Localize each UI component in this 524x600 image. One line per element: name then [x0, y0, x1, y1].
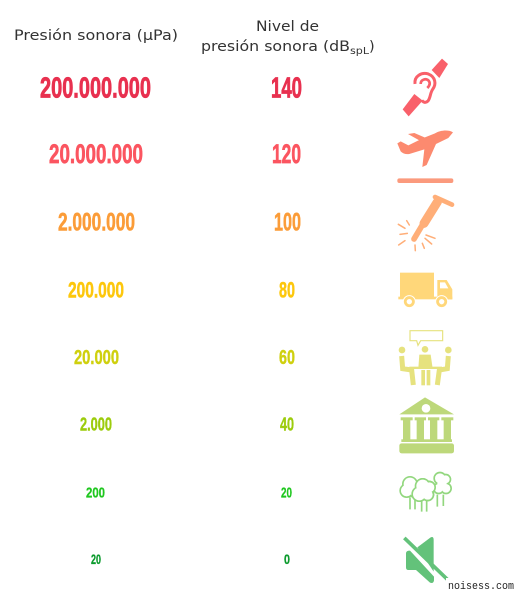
row 8: 20 / 0: 0	[284, 551, 290, 567]
row 5: 20.000 / 60: 20.000	[74, 347, 119, 369]
icon: hearing impaired ear	[403, 59, 448, 116]
heading: sound pressure level: presión sonora (dB	[201, 39, 350, 55]
row 7: 200 / 20: 20	[281, 484, 292, 502]
row 7: 200 / 20: 200	[86, 484, 105, 502]
row 2: 20.000.000 / 120: 120	[272, 139, 301, 169]
row 6: 2.000 / 40: 2.000	[80, 414, 112, 434]
heading: sound pressure level: )	[369, 39, 375, 55]
row 6: 2.000 / 40	[80, 414, 294, 434]
row 6: 2.000 / 40: 40	[280, 414, 294, 434]
icon: jackhammer	[398, 197, 452, 251]
heading: sound pressure level	[201, 19, 375, 57]
heading: sound pressure level: Nivel de	[256, 19, 319, 35]
icon: delivery truck	[398, 273, 452, 308]
row 3: 2.000.000 / 100	[58, 208, 301, 236]
row 4: 200.000 / 80	[68, 278, 295, 302]
row 3: 2.000.000 / 100: 2.000.000	[58, 208, 135, 236]
row 1: 200.000.000 / 140: 140	[271, 72, 302, 104]
row 7: 200 / 20	[86, 484, 292, 502]
row 4: 200.000 / 80: 80	[279, 278, 295, 302]
row 2: 20.000.000 / 120: 20.000.000	[49, 139, 143, 169]
row 1: 200.000.000 / 140	[40, 72, 302, 104]
row 1: 200.000.000 / 140: 200.000.000	[40, 72, 151, 104]
row 4: 200.000 / 80: 200.000	[68, 278, 124, 302]
icon: airplane taking off	[397, 131, 453, 183]
watermark: noisess.com	[448, 581, 514, 593]
heading: sound pressure level: spL	[350, 46, 370, 57]
row 2: 20.000.000 / 120	[49, 139, 301, 169]
row 3: 2.000.000 / 100: 100	[274, 208, 301, 236]
icon: muted speaker	[404, 537, 450, 583]
heading: sound pressure: Presión sonora (µPa)	[14, 28, 178, 44]
icon: trees	[399, 472, 452, 512]
row 5: 20.000 / 60	[74, 347, 295, 369]
icon: people meeting	[399, 331, 452, 385]
row 5: 20.000 / 60: 60	[279, 347, 295, 369]
icon: bank building	[399, 397, 454, 453]
row 8: 20 / 0: 20	[91, 551, 101, 567]
row 8: 20 / 0	[91, 551, 290, 567]
